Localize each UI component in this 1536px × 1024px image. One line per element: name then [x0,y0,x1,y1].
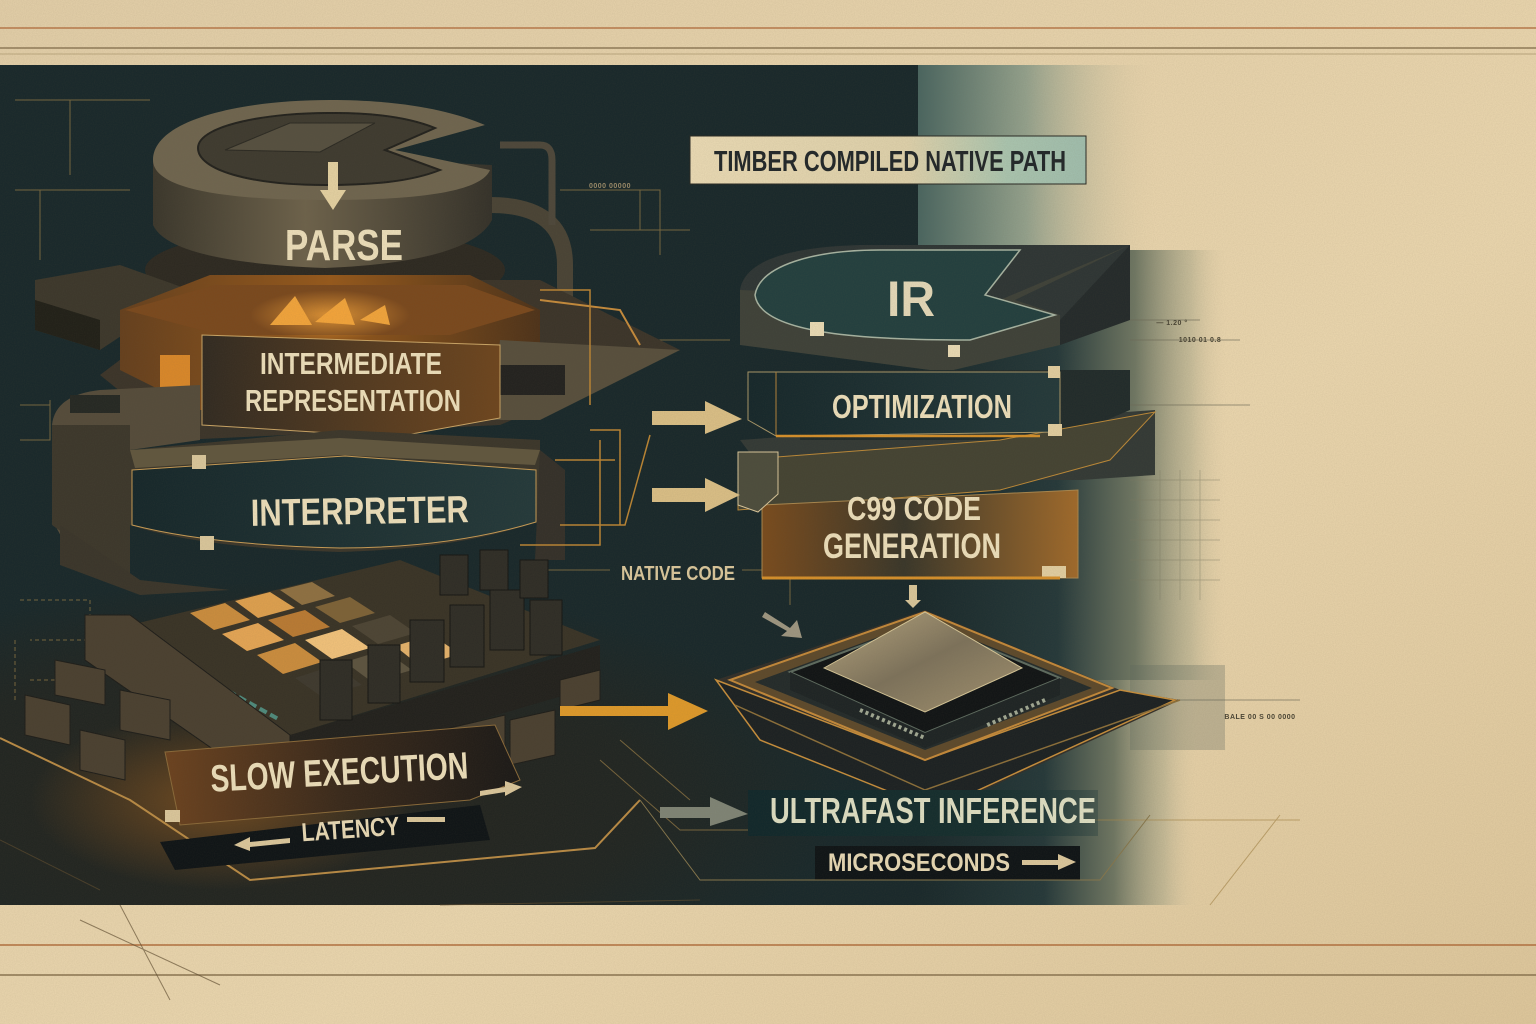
pipe connector [490,205,565,300]
panel: timber title [690,136,1086,184]
label: C99 code generation [762,490,1078,578]
label: microseconds: MICROSECONDS [828,849,1010,877]
pipe upper [500,145,552,225]
arrows and connectors [520,290,802,826]
arrow: to chip [762,612,802,638]
block: IR drum [740,245,1130,372]
label: C99 code generation: C99 CODE [847,490,981,527]
label: native code [612,558,742,588]
arrow: upper [652,401,742,434]
icon: right arrow [1022,854,1076,870]
tiny annotations [589,183,1296,721]
label: ultrafast inference: ULTRAFAST INFERENCE [770,790,1096,831]
panel: interpreter path stack [0,100,680,880]
icon: arrow right [480,781,522,796]
arrow: orange [560,693,708,730]
tiny annotations: — 1.20 ° [1156,319,1188,327]
tiny annotations: BALE 00 S 00 0000 [1224,714,1296,721]
label: intermediate representation: REPRESENTATION [245,383,461,418]
tiny annotations: 1010 01 0.8 [1179,337,1221,344]
label: interpreter [132,456,536,548]
block: parse drum [145,100,505,312]
grid fade right [1130,470,1225,750]
label: parse: PARSE [285,221,403,270]
block: interpreter drum [52,385,565,595]
base outline right [640,800,1150,880]
icon: down pointer [905,585,921,608]
block: memory tile grid [25,550,600,780]
label: native code: NATIVE CODE [621,563,735,585]
label: slow execution [165,725,522,825]
block: IR drum: IR [887,271,935,327]
icon: chip top [824,612,1022,712]
bottom rule lines [0,945,1536,975]
arrow: grey to ultrafast [660,797,748,826]
label: intermediate representation [202,335,500,437]
label: microseconds [815,846,1080,880]
icon: down arrow on parse [320,162,346,210]
label: optimization [748,366,1062,436]
chip assembly [716,610,1180,815]
block: small notch tab [738,452,778,512]
label: interpreter: INTERPRETER [250,489,469,535]
label: C99 code generation: GENERATION [823,527,1001,566]
icon: left arrow latency [234,837,290,851]
arrow: lower [652,478,740,512]
circuit traces [0,100,1300,1000]
platform base [0,738,640,880]
label: intermediate representation: INTERMEDIATE [260,346,442,381]
dark blueprint panel [0,65,1212,905]
label: ultrafast inference [748,790,1098,836]
top rule lines [0,28,1536,54]
block: IR tier with orange centre [35,265,680,440]
label: optimization: OPTIMIZATION [832,388,1012,425]
panel: native compiled path [738,245,1155,608]
label: latency [160,805,490,870]
label: latency: LATENCY [300,811,400,847]
block: lower tiers [740,410,1155,480]
label: slow execution: SLOW EXECUTION [209,745,469,801]
panel: timber title: TIMBER COMPILED NATIVE PATH [714,146,1066,178]
tiny annotations: 0000 00000 [589,183,631,190]
